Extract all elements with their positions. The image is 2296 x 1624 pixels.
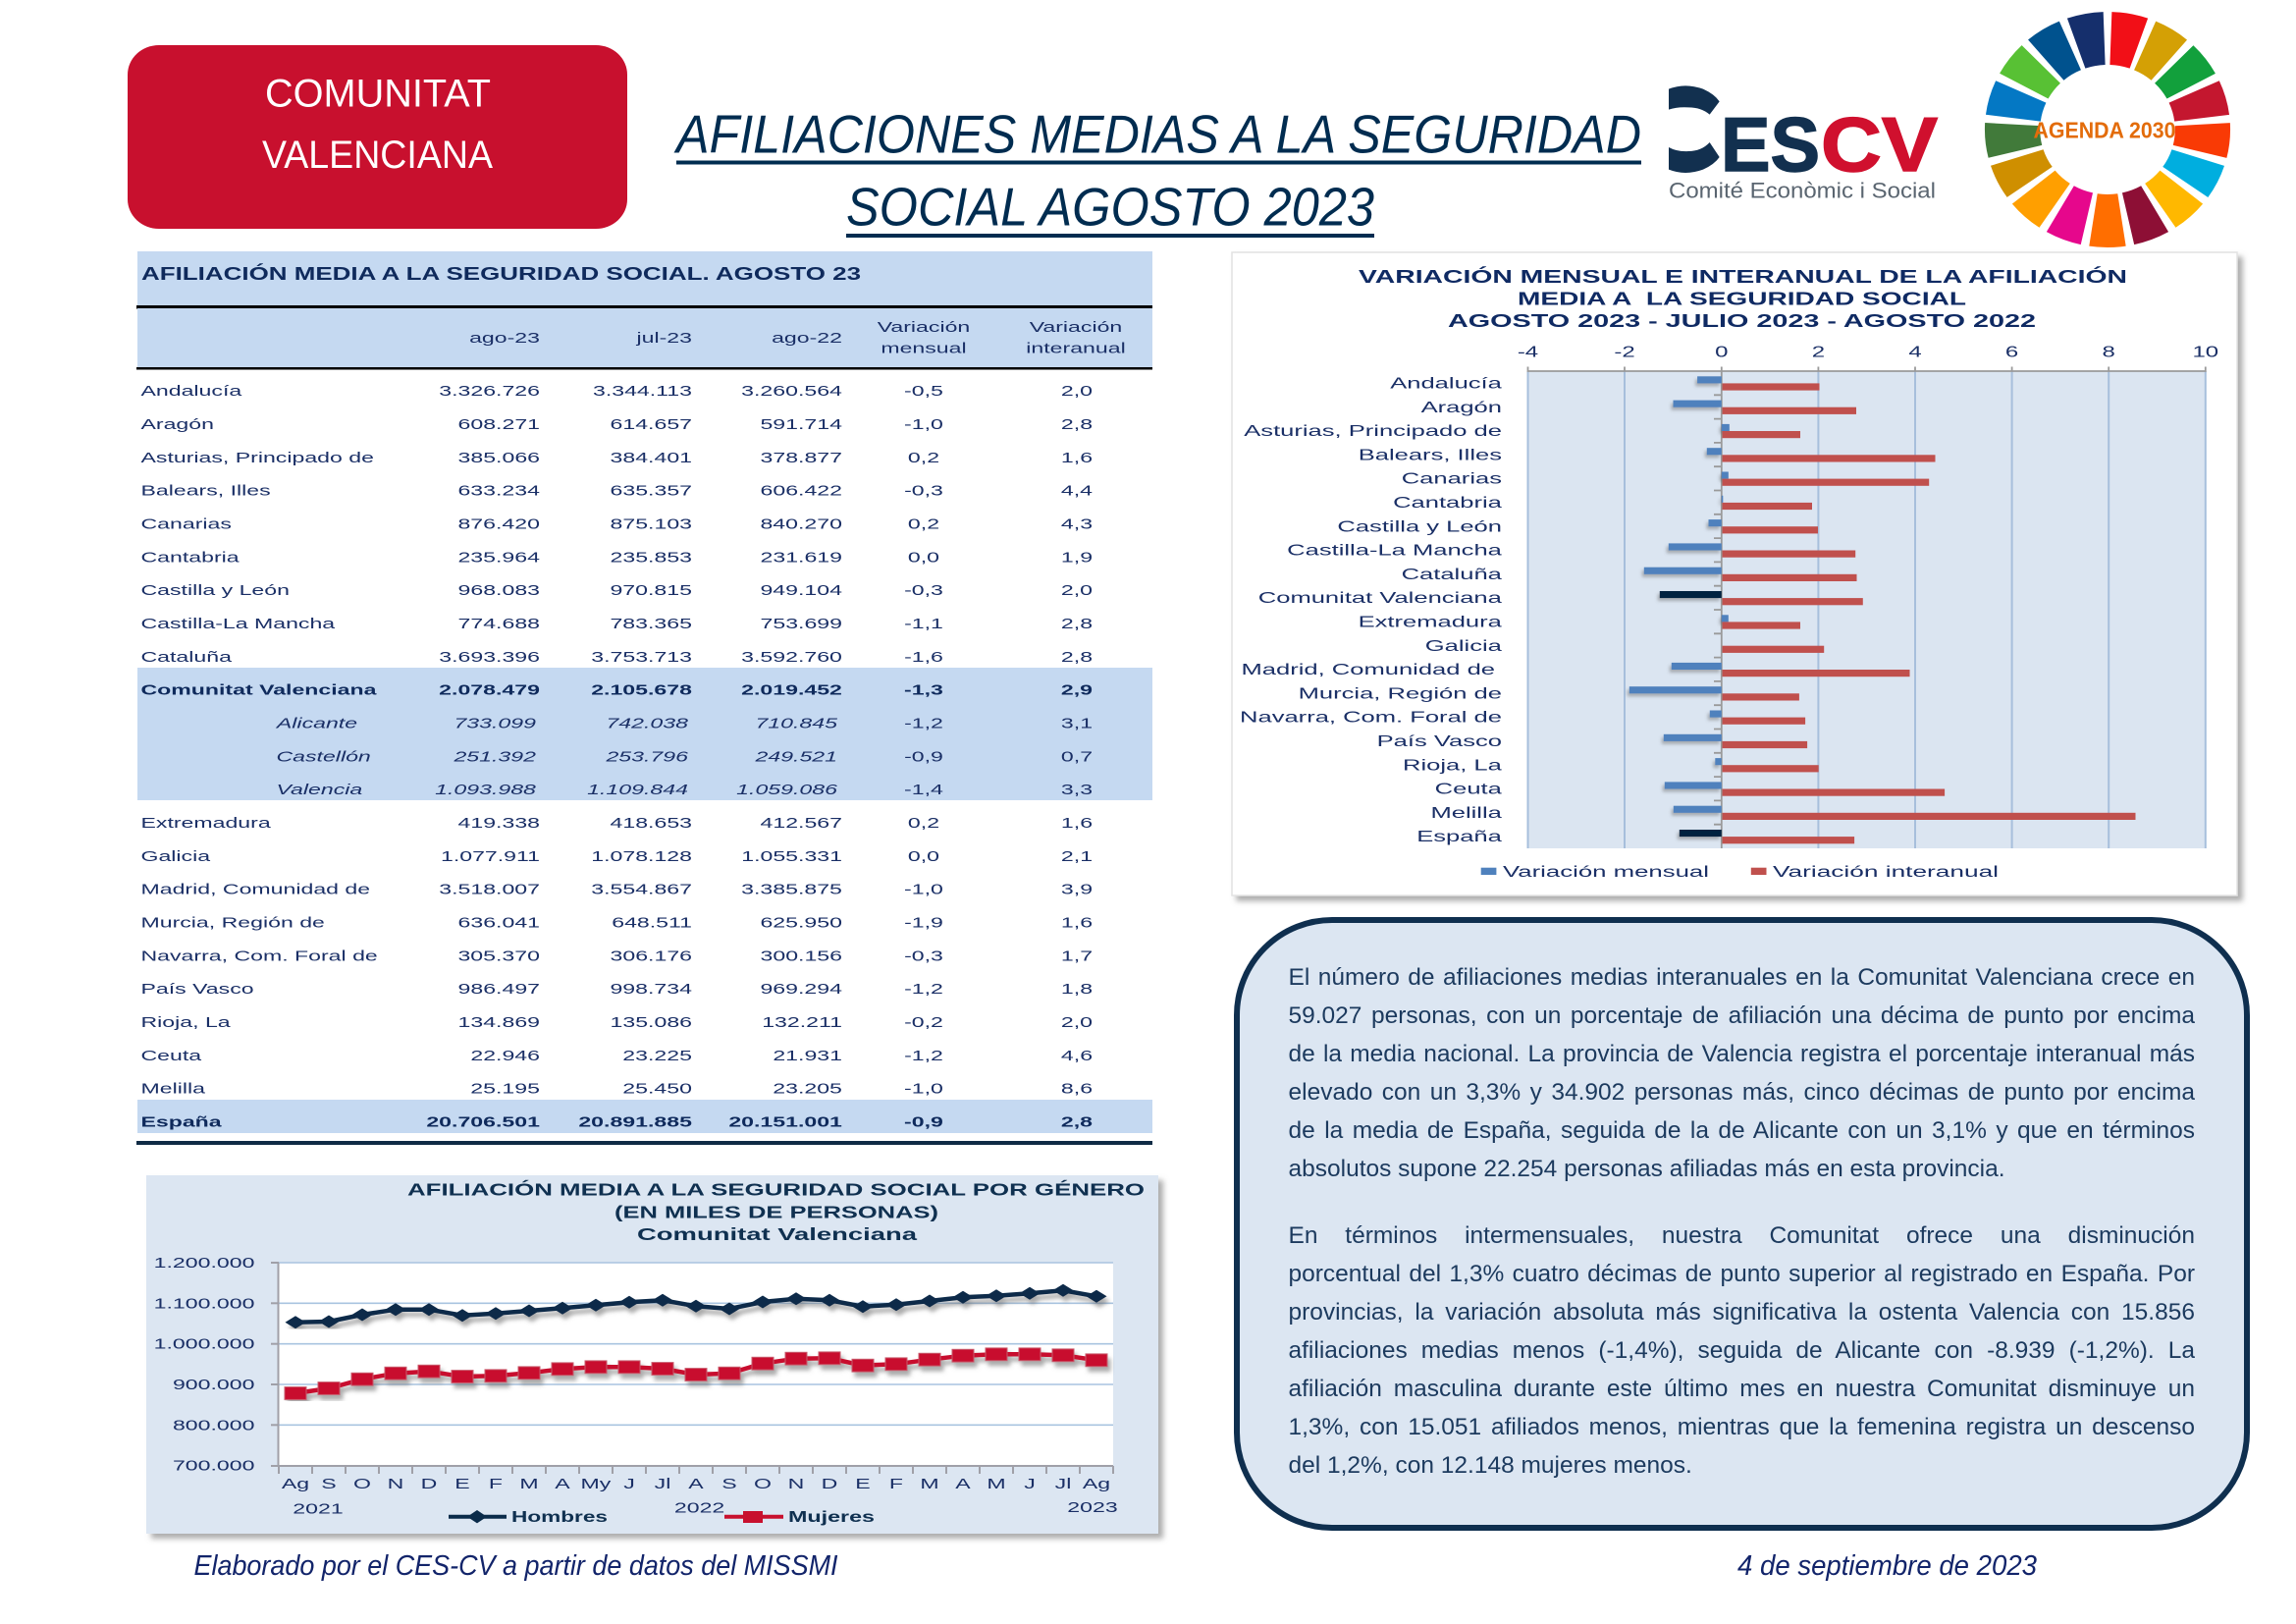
panel: commentary text box: de la media nacional. La provincia de Valencia registra el porcentaje interanual más	[1288, 1041, 2195, 1067]
table row: Rioja: 132.211	[762, 1014, 842, 1031]
table row: Cantabria: 1,9	[1061, 549, 1093, 566]
table row: Ceuta	[140, 1048, 1093, 1064]
table row: País Vasco: 998.734	[610, 981, 692, 998]
y axis labels: 800.000	[173, 1417, 255, 1434]
panel: commentary text box: afiliación masculina durante este último mes en nuestra Comunitat disminuye un	[1288, 1375, 2195, 1402]
table row: Castilla-La Mancha: 753.699	[761, 616, 842, 632]
icon: Agenda 2030 SDG wheel: AGENDA 2030	[2034, 118, 2175, 143]
table row: Balears: 4,4	[1061, 483, 1093, 500]
table row: Madrid: 3,9	[1061, 882, 1093, 898]
x axis labels: 0	[1715, 344, 1728, 360]
x axis labels: N	[788, 1476, 804, 1492]
x axis labels: D	[421, 1476, 437, 1492]
table row: Madrid	[140, 882, 1093, 898]
table row: Comunitat Valenciana: 2.078.479	[439, 682, 540, 699]
table row: Asturias: 1,6	[1061, 450, 1093, 466]
category labels: Melilla	[1430, 805, 1502, 822]
y axis labels: 1.100.000	[154, 1295, 255, 1312]
table row: Galicia: 2,1	[1061, 848, 1093, 865]
table row: Castellón: Castellón	[277, 748, 371, 765]
table column headers: Variación	[1030, 319, 1122, 336]
x axis labels: M	[920, 1476, 939, 1492]
table row: Extremadura: 1,6	[1061, 815, 1093, 832]
table row: Balears: 635.357	[611, 483, 692, 500]
table row: Galicia: 1.055.331	[741, 848, 842, 865]
x axis labels: F	[889, 1476, 903, 1492]
table row: Canarias: 875.103	[611, 515, 692, 532]
table row: Murcia	[140, 914, 1093, 931]
title: AFILIACIONES MEDIAS A LA SEGURIDAD	[673, 104, 1641, 165]
table row: Asturias	[140, 450, 1093, 466]
table row: Andalucía: -0,5	[904, 383, 943, 400]
table row: Asturias: 384.401	[611, 450, 692, 466]
bars: annual variation	[1722, 383, 2136, 843]
table row: España: 2,8	[1061, 1113, 1093, 1130]
year labels: 2022	[674, 1499, 724, 1516]
x axis labels: Jl	[1055, 1476, 1071, 1492]
chart title: AFILIACIÓN MEDIA A LA SEGURIDAD SOCIAL POR GÉNERO	[407, 1178, 1145, 1200]
table row: Aragón: 608.271	[458, 416, 540, 433]
table row: Castellón: 253.796	[605, 748, 688, 765]
table row: Asturias: 385.066	[458, 450, 540, 466]
panel: commentary text box	[1234, 917, 2250, 1531]
table row: Melilla: -1,0	[904, 1081, 943, 1097]
badge: Comunitat Valenciana: VALENCIANA	[262, 134, 493, 177]
table row: Castellón: 251.392	[453, 748, 536, 765]
x axis labels: 4	[1908, 344, 1922, 360]
table column headers: mensual	[881, 341, 967, 357]
table row: Castellón: 249.521	[754, 748, 837, 765]
table row: Comunitat Valenciana: 2.105.678	[591, 682, 692, 699]
table row: Aragón: Aragón	[140, 416, 214, 433]
table row: Cataluña	[140, 649, 1093, 666]
chart title: AGOSTO 2023 - JULIO 2023 - AGOSTO 2022	[1448, 310, 2036, 331]
table row: Aragón: 614.657	[611, 416, 692, 433]
panel: variation bar chart	[1232, 252, 2237, 895]
x axis labels: Ag	[282, 1476, 309, 1492]
badge: Comunitat Valenciana	[128, 45, 627, 229]
table row: Castilla y León: 968.083	[458, 582, 540, 599]
table row: Valencia: 1.059.086	[736, 782, 837, 798]
x axis labels: 8	[2103, 344, 2115, 360]
table row: Alicante: 3,1	[1061, 715, 1093, 731]
logo: CES CV: ES	[1721, 101, 1820, 188]
category labels: Cantabria	[1393, 495, 1502, 512]
category labels: Navarra, Com. Foral de	[1240, 710, 1502, 726]
table row: Melilla: 25.450	[622, 1081, 692, 1097]
x axis labels: E	[454, 1476, 470, 1492]
table row: Melilla: 25.195	[470, 1081, 540, 1097]
table row: Melilla: 23.205	[773, 1081, 842, 1097]
panel: commentary text box: 1,3%, con 15.051 afiliados menos, mientras que la femenina registra un descenso	[1288, 1414, 2195, 1439]
x axis labels: -4	[1518, 344, 1538, 360]
panel: commentary text box: El número de afiliaciones medias interanuales en la Comunitat Valenciana crece en	[1288, 964, 2195, 991]
x axis labels: D	[822, 1476, 837, 1492]
category labels: España	[1416, 829, 1502, 845]
x axis labels: J	[1024, 1476, 1036, 1492]
table row: Alicante	[276, 715, 1093, 731]
x axis labels: E	[855, 1476, 871, 1492]
series: Hombres	[295, 1290, 1096, 1323]
table row: Aragón: -1,0	[904, 416, 943, 433]
table row: Castellón	[277, 748, 1093, 765]
chart title: VARIACIÓN MENSUAL E INTERANUAL DE LA AFILIACIÓN	[1359, 266, 2127, 287]
table row: Valencia	[277, 782, 1093, 798]
panel: commentary text box: absolutos supone 22.254 personas afiliadas más en esta provincia.	[1288, 1156, 2005, 1182]
series: Mujeres	[295, 1354, 1096, 1393]
x axis labels: S	[321, 1476, 337, 1492]
x axis labels: M	[519, 1476, 539, 1492]
table row: España	[140, 1113, 1093, 1130]
x axis labels: My	[581, 1476, 612, 1492]
plot area	[1527, 371, 2205, 848]
table row: Valencia: Valencia	[277, 782, 362, 798]
table column headers: ago-23	[469, 330, 540, 347]
panel: commentary text box: afiliaciones medias menos (-1,4%), seguida de Alicante con -8.939 (-1,2%). La	[1288, 1337, 2195, 1363]
table row: Cantabria: 235.853	[611, 549, 692, 566]
x axis labels: S	[721, 1476, 737, 1492]
table row: Andalucía: 3.344.113	[593, 383, 692, 400]
table row: Alicante: 742.038	[606, 715, 688, 731]
table row: Castellón: -0,9	[904, 748, 943, 765]
panel: affiliation table	[136, 251, 1152, 1145]
category labels: Cataluña	[1402, 567, 1502, 583]
table row: Cantabria: 231.619	[761, 549, 842, 566]
table heading: AFILIACIÓN MEDIA A LA SEGURIDAD SOCIAL. AGOSTO 23	[141, 263, 861, 284]
table row: Balears: -0,3	[904, 483, 943, 500]
legend: Mujeres	[788, 1509, 875, 1526]
table row: Cataluña: Cataluña	[140, 649, 232, 666]
x axis labels: 10	[2192, 344, 2218, 360]
table row: Murcia: 1,6	[1061, 914, 1093, 931]
x axis labels: F	[489, 1476, 503, 1492]
table row: Andalucía: 3.326.726	[439, 383, 540, 400]
table row: Navarra	[140, 947, 1093, 964]
table row: Asturias: Asturias, Principado de	[140, 450, 374, 466]
table row: Navarra: Navarra, Com. Foral de	[140, 947, 378, 964]
table row: Alicante: 710.845	[755, 715, 837, 731]
year labels: 2023	[1067, 1499, 1118, 1516]
table row: Aragón: 2,8	[1061, 416, 1093, 433]
x axis labels: 6	[2005, 344, 2018, 360]
category labels: Rioja, La	[1403, 757, 1502, 774]
panel: commentary text box: del 1,2%, con 12.148 mujeres menos.	[1288, 1451, 1692, 1479]
table row: Castilla y León: -0,3	[904, 582, 943, 599]
table row: Alicante: Alicante	[276, 715, 357, 731]
table row: Balears: 633.234	[457, 483, 540, 500]
table row: Alicante: 733.099	[454, 715, 536, 731]
table row: Balears: 606.422	[761, 483, 842, 500]
table row: Rioja	[140, 1014, 1093, 1031]
x axis labels: Jl	[655, 1476, 670, 1492]
x axis labels: M	[987, 1476, 1006, 1492]
table row: España: -0,9	[904, 1113, 943, 1130]
table row: Cantabria: Cantabria	[140, 549, 240, 566]
table row: Ceuta: 23.225	[622, 1048, 692, 1064]
panel: commentary text box: de la media de España, seguida de la de Alicante con un 3,1% y que en términos	[1288, 1117, 2195, 1144]
table row: Madrid: Madrid, Comunidad de	[140, 882, 370, 898]
x axis labels: N	[388, 1476, 403, 1492]
x axis labels: Ag	[1083, 1476, 1110, 1492]
category labels: Murcia, Región de	[1299, 685, 1502, 702]
table row: Castilla-La Mancha: -1,1	[904, 616, 943, 632]
table row: Asturias: 0,2	[908, 450, 939, 466]
logo: CES CV	[1669, 85, 1938, 203]
x axis labels: 2	[1812, 344, 1825, 360]
title	[673, 104, 1641, 238]
table row: Cataluña: 3.592.760	[741, 649, 842, 666]
table row: Balears	[140, 483, 1093, 500]
table row: Galicia: 1.077.911	[441, 848, 540, 865]
x axis labels: O	[353, 1476, 371, 1492]
table row: Castilla y León	[140, 582, 1093, 599]
year labels: 2021	[293, 1500, 344, 1517]
x axis labels: J	[623, 1476, 635, 1492]
table row: Madrid: 3.385.875	[741, 882, 842, 898]
table row: Murcia: -1,9	[904, 914, 943, 931]
table column headers	[137, 308, 1152, 367]
category labels: Extremadura	[1359, 614, 1502, 630]
table row: Castilla-La Mancha	[140, 616, 1093, 632]
table row: Rioja: -0,2	[904, 1014, 943, 1031]
table row: Comunitat Valenciana	[140, 682, 1093, 699]
table row: Melilla	[140, 1081, 1093, 1097]
table row: Murcia: 625.950	[760, 914, 842, 931]
table row: Valencia: 1.109.844	[587, 782, 688, 798]
table row: Castilla-La Mancha: 783.365	[610, 616, 692, 632]
table row: Canarias: 840.270	[760, 515, 842, 532]
table row: Murcia: 648.511	[612, 914, 692, 931]
table row: Comunitat Valenciana: Comunitat Valenciana	[140, 682, 377, 699]
table row: Asturias: 378.877	[761, 450, 842, 466]
table row: Castilla y León: 970.815	[610, 582, 692, 599]
table row: Rioja: 135.086	[611, 1014, 692, 1031]
category labels: Balears, Illes	[1359, 447, 1502, 463]
table row: Comunitat Valenciana: 2.019.452	[741, 682, 842, 699]
table row: Comunitat Valenciana: 2,9	[1061, 682, 1093, 699]
table row: Valencia: -1,4	[904, 782, 943, 798]
y axis labels	[154, 1255, 255, 1475]
table row: Canarias: 0,2	[908, 515, 939, 532]
table row: Castellón: 0,7	[1061, 748, 1093, 765]
icon: Agenda 2030 SDG wheel	[1979, 6, 2235, 252]
table row: Andalucía: 2,0	[1061, 383, 1093, 400]
table row: Extremadura: 418.653	[611, 815, 692, 832]
table column headers: Variación	[878, 319, 970, 336]
table row: País Vasco: País Vasco	[140, 981, 254, 998]
chart title: Comunitat Valenciana	[637, 1224, 917, 1244]
x axis labels: A	[955, 1476, 971, 1492]
logo: CES CV: CV	[1821, 101, 1938, 188]
category labels: Asturias, Principado de	[1244, 423, 1502, 440]
source note: Elaborado por el CES-CV a partir de datos del MISSMI	[194, 1550, 838, 1582]
table row: Cataluña: 2,8	[1061, 649, 1093, 666]
legend: Variación interanual	[1773, 864, 1999, 881]
y axis labels: 1.000.000	[154, 1336, 255, 1353]
y axis labels: 700.000	[173, 1458, 255, 1475]
category labels: País Vasco	[1377, 733, 1502, 750]
table column headers: jul-23	[635, 330, 692, 347]
table row: País Vasco: 986.497	[458, 981, 540, 998]
table row: Navarra: 1,7	[1061, 947, 1093, 964]
table row: Castilla-La Mancha: Castilla-La Mancha	[140, 616, 335, 632]
table row: Canarias	[140, 515, 1093, 532]
table row: Andalucía	[140, 383, 1093, 400]
logo: CES CV: Comité Econòmic i Social	[1669, 179, 1936, 203]
table row: Castilla y León: 2,0	[1061, 582, 1093, 599]
table column headers: ago-22	[772, 330, 842, 347]
table row: Rioja: 2,0	[1061, 1014, 1093, 1031]
panel: commentary text box: porcentual del 1,3% cuatro décimas de punto superior al registrado en España. Por	[1288, 1261, 2195, 1286]
category labels: Aragón	[1421, 400, 1502, 415]
table row: Cantabria: 235.964	[457, 549, 540, 566]
legend	[1481, 864, 1999, 881]
badge: Comunitat Valenciana: COMUNITAT	[265, 73, 491, 116]
chart title: MEDIA A LA SEGURIDAD SOCIAL	[1518, 289, 1966, 308]
table row: Galicia: Galicia	[140, 848, 210, 865]
table row: País Vasco: 969.294	[760, 981, 842, 998]
chart title	[407, 1178, 1145, 1244]
x axis labels: -2	[1614, 344, 1635, 360]
table row: Galicia	[140, 848, 1093, 865]
bars: monthly variation	[1629, 376, 1730, 837]
table row: España: 20.151.001	[728, 1113, 842, 1130]
table row: Aragón: 591.714	[760, 416, 842, 433]
table row: Madrid: 3.554.867	[591, 882, 692, 898]
category labels: Castilla y León	[1337, 518, 1502, 535]
legend: Hombres	[511, 1509, 608, 1526]
table row: Murcia: Murcia, Región de	[140, 914, 325, 931]
table row: Navarra: 300.156	[761, 947, 842, 964]
panel: commentary text box: provincias, la variación absoluta más significativa la ostenta Valencia con 15.856	[1288, 1298, 2195, 1326]
table row: Ceuta: 21.931	[773, 1048, 842, 1064]
table row: Canarias: Canarias	[140, 515, 232, 532]
table row: País Vasco	[140, 981, 1093, 998]
table row: Navarra: -0,3	[904, 947, 943, 964]
table row: Castilla y León: Castilla y León	[140, 582, 290, 599]
table row: Ceuta: 4,6	[1061, 1048, 1093, 1064]
x axis labels	[282, 1476, 1110, 1492]
table row: Navarra: 305.370	[457, 947, 540, 964]
table row: País Vasco: 1,8	[1061, 981, 1093, 998]
chart title	[1359, 266, 2127, 331]
table row: Rioja: Rioja, La	[140, 1014, 231, 1031]
table row: Navarra: 306.176	[611, 947, 692, 964]
table row: Cataluña: 3.693.396	[439, 649, 540, 666]
plot area	[279, 1263, 1113, 1466]
category labels: Canarias	[1402, 471, 1502, 487]
x axis labels	[1518, 344, 2218, 360]
y axis labels: 1.200.000	[154, 1255, 255, 1272]
table row: Extremadura: Extremadura	[140, 815, 271, 832]
table row: Valencia: 3,3	[1061, 782, 1093, 798]
table row: Extremadura: 412.567	[761, 815, 842, 832]
table row: Andalucía: 3.260.564	[741, 383, 842, 400]
table row: España: 20.891.885	[578, 1113, 692, 1130]
table row: Murcia: 636.041	[458, 914, 540, 931]
category labels: Castilla-La Mancha	[1287, 542, 1502, 559]
category labels: Andalucía	[1390, 375, 1502, 392]
legend: Variación mensual	[1503, 864, 1709, 881]
table row: Andalucía: Andalucía	[140, 383, 241, 400]
table row: Galicia: 0,0	[908, 848, 939, 865]
category labels: Madrid, Comunidad de	[1242, 662, 1495, 678]
y axis labels: 900.000	[173, 1377, 255, 1393]
category labels	[1240, 375, 1502, 845]
chart title: (EN MILES DE PERSONAS)	[614, 1202, 938, 1221]
table row: España: España	[140, 1113, 222, 1130]
table row: Cantabria	[140, 549, 1093, 566]
table row: Castilla-La Mancha: 774.688	[458, 616, 540, 632]
table row: Madrid: 3.518.007	[439, 882, 540, 898]
table column headers: interanual	[1026, 341, 1126, 357]
x axis labels: A	[688, 1476, 704, 1492]
table row: Extremadura	[140, 815, 1093, 832]
x axis labels: A	[555, 1476, 570, 1492]
table row: Cataluña: -1,6	[904, 649, 943, 666]
table row: Comunitat Valenciana: -1,3	[904, 682, 943, 699]
date: 4 de septiembre de 2023	[1737, 1550, 2037, 1582]
table row: Valencia: 1.093.988	[435, 782, 536, 798]
category labels: Ceuta	[1435, 781, 1502, 797]
table row: Extremadura: 419.338	[458, 815, 540, 832]
table row: Ceuta: -1,2	[904, 1048, 943, 1064]
title: SOCIAL AGOSTO 2023	[846, 177, 1374, 238]
table row: Rioja: 134.869	[458, 1014, 540, 1031]
table row: Ceuta: 22.946	[470, 1048, 540, 1064]
panel: commentary text box: En términos intermensuales, nuestra Comunitat ofrece una disminución	[1288, 1221, 2195, 1249]
table row: Melilla: 8,6	[1061, 1081, 1093, 1097]
table row: Extremadura: 0,2	[908, 815, 939, 832]
table row: Galicia: 1.078.128	[591, 848, 692, 865]
table row: Madrid: -1,0	[904, 882, 943, 898]
year labels	[293, 1499, 1118, 1517]
panel: gender line chart	[146, 1175, 1158, 1534]
table row: País Vasco: -1,2	[904, 981, 943, 998]
table row: Canarias: 876.420	[457, 515, 540, 532]
table row: Cataluña: 3.753.713	[591, 649, 692, 666]
category labels: Comunitat Valenciana	[1258, 590, 1502, 607]
table row: Ceuta: Ceuta	[140, 1048, 201, 1064]
table row: Castilla-La Mancha: 2,8	[1061, 616, 1093, 632]
x axis labels: O	[754, 1476, 772, 1492]
table heading	[137, 251, 1152, 306]
panel: commentary text box: 59.027 personas, con un porcentaje de afiliación una décima de punto por encima	[1288, 1002, 2195, 1029]
table row: Alicante: -1,2	[904, 715, 943, 731]
table row: España: 20.706.501	[426, 1113, 540, 1130]
panel: commentary text box: elevado con un 3,3% y 34.902 personas más, cinco décimas de punto por encima	[1288, 1079, 2195, 1106]
table row: Balears: Balears, Illes	[140, 483, 271, 500]
table row: Aragón	[140, 416, 1093, 433]
legend	[449, 1509, 875, 1526]
table row: Melilla: Melilla	[140, 1081, 205, 1097]
table row: Castilla y León: 949.104	[760, 582, 842, 599]
table row: Canarias: 4,3	[1061, 515, 1093, 532]
category labels: Galicia	[1425, 638, 1502, 654]
table row: Cantabria: 0,0	[908, 549, 939, 566]
